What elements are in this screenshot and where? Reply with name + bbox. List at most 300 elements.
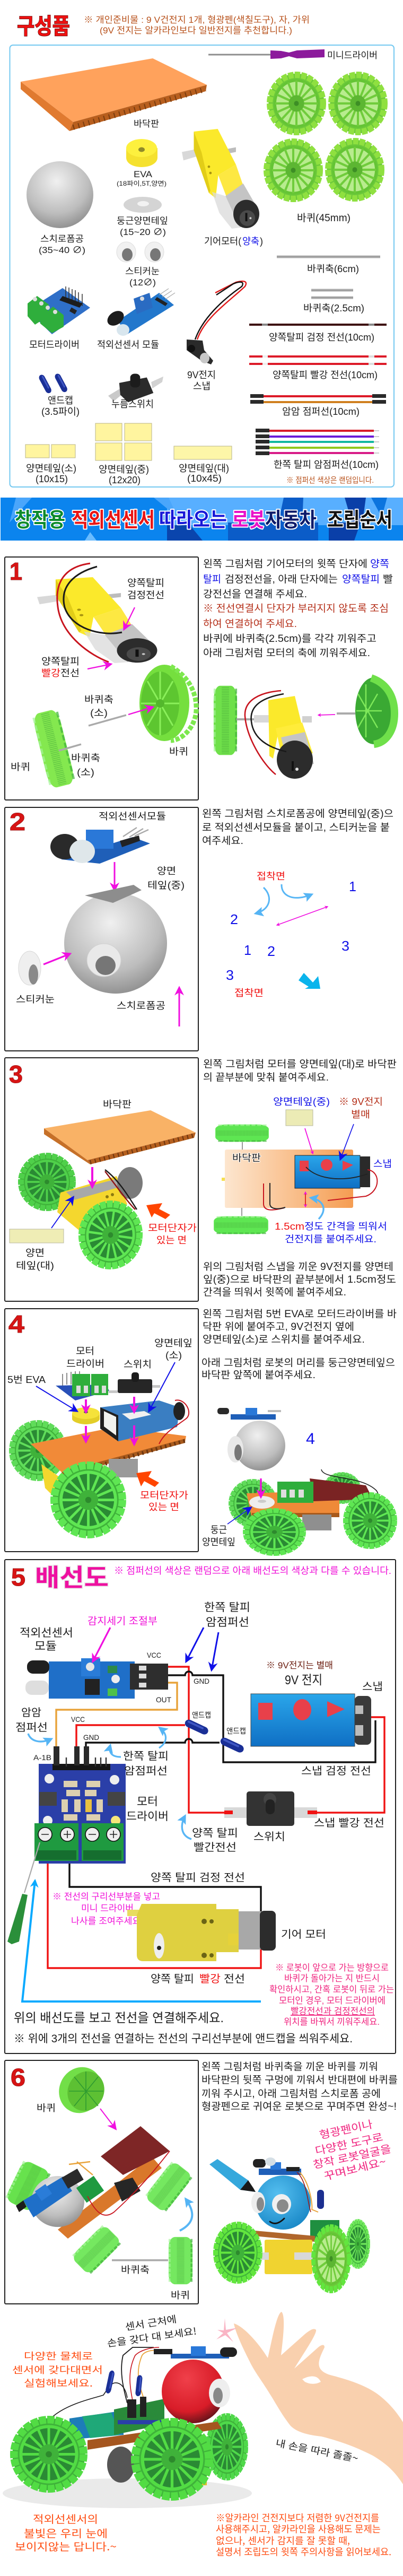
- illustration: battery placement: 바닥판: [232, 1153, 261, 1163]
- text block: step 1 instructions: ※ 전선연결시 단자가 부러지지 않도록 조심: [203, 603, 389, 614]
- illustration: red robot car: [3, 2346, 252, 2508]
- icon: front wheel: [52, 1464, 124, 1536]
- label: wheels: 바퀴(45mm): [297, 212, 351, 224]
- note: rotation direction: 빨강전선과 검정전선의: [291, 2006, 375, 2016]
- callout: pen decoration: 꾸며보세요~: [322, 2153, 388, 2183]
- wire labels: GND: [194, 1677, 209, 1685]
- icon: mini screwdriver: [208, 49, 325, 59]
- label: wheel: 바퀴: [37, 2103, 56, 2113]
- label: sticker eyes: (12∅): [129, 277, 156, 288]
- label: sticker eyes: 스티커눈: [125, 266, 160, 276]
- text block: step 1 instructions: 양쪽탈피: [342, 573, 380, 585]
- wire labels: VCC: [71, 1715, 85, 1724]
- label: driver: 모터: [137, 1796, 158, 1808]
- text block: step 1 instructions: 강전선을 연결해 주세요.: [203, 588, 307, 600]
- label: tape medium: [147, 866, 185, 891]
- icon: large double-sided tape: [174, 446, 232, 459]
- text block: IR invisible: 적외선센서의: [33, 2511, 98, 2526]
- label: both-side red: 양쪽 탈피: [151, 1973, 194, 1985]
- title: components heading: 구성품: [17, 14, 70, 39]
- illustration: battery placement: 건전지를 붙여주세요.: [285, 1234, 376, 1245]
- wire labels: VCC: [147, 1651, 161, 1659]
- label: both-side red: [192, 1827, 238, 1853]
- arrow: label to EVA: [36, 1386, 77, 1411]
- icon: gear motor with wires: [37, 563, 157, 663]
- label: axle right: [84, 694, 113, 718]
- label: motor terminal side: [140, 1490, 188, 1512]
- label: gear motor: 기어 모터: [281, 1928, 326, 1940]
- label: round tape: (15~20 ∅): [120, 227, 166, 237]
- label: EVA: (18파이,5T,양면): [117, 180, 167, 187]
- label: snap: 스냅: [362, 1681, 383, 1693]
- icon: one-side stripped jumper wires: [256, 429, 379, 455]
- label: driver: 드라이버: [126, 1811, 169, 1823]
- icon: end caps: [38, 372, 68, 394]
- label: sticker eye: 스티커눈: [16, 994, 55, 1005]
- handwritten note: hand near sensor: 센서 근처에: [124, 2312, 178, 2334]
- panel: components: [10, 45, 394, 487]
- text block: step 1 instructions: 빨: [383, 573, 393, 585]
- label: one-side jumper top: 한쪽 탈피: [204, 1602, 250, 1614]
- label: axle 6cm: 바퀴축(6cm): [307, 264, 359, 274]
- icon: axle left: [59, 744, 81, 751]
- text block: IR invisible: [15, 2511, 117, 2554]
- handwritten note: hand near sensor: [106, 2312, 197, 2350]
- label: one-side jumper top: 암점퍼선: [206, 1616, 249, 1629]
- text block: test with objects: [12, 2349, 103, 2390]
- arrow: to lower terminal: [87, 664, 111, 669]
- text block: step 2 instructions: 여주세요.: [202, 835, 243, 847]
- icon: switch: [224, 1791, 317, 1826]
- arrow: jumper one: [186, 1628, 204, 1661]
- label: tape medium: 양면: [157, 866, 176, 876]
- icon: motor driver board: [34, 1746, 126, 1864]
- label: sensitivity adjust: 감지세기 조절부: [87, 1615, 157, 1627]
- panel: step 6: [4, 2060, 198, 2304]
- label: FF jumper: 점퍼선: [15, 1721, 48, 1734]
- arrow: wheel up: [180, 2199, 192, 2231]
- arrow: label to tape: [149, 1362, 175, 1411]
- label: push switch: 누름스위치: [111, 399, 154, 410]
- illustration: battery placement: ※ 9V전지: [339, 1096, 383, 1107]
- label: snap red wire: 스냅 빨강 전선: [314, 1817, 384, 1829]
- label: 9V snap: [187, 370, 216, 391]
- diagram: sticking faces: 접착면: [234, 988, 264, 998]
- step number 6: 6: [11, 2064, 25, 2091]
- label: IR module: 적외선센서모듈: [99, 811, 166, 822]
- text block: step 1 instructions: 아래 그림처럼 모터의 축에 끼워주세요.: [203, 647, 370, 659]
- icon: four wheels: [265, 74, 386, 200]
- illustration: blue robot: [209, 2157, 370, 2291]
- label: right wheel: 바퀴: [169, 746, 188, 757]
- icon: medium double-sided tape: [95, 423, 152, 460]
- text block: step 2 instructions: 왼쪽 그림처럼 스치로폼공에 양면테잎(중)으: [202, 808, 393, 820]
- banner: assembly title: 적외선센서: [72, 509, 155, 532]
- label: round tape: 둥근양면테잎: [117, 216, 168, 226]
- end caps on wires: [183, 1711, 246, 1754]
- label: black wire: [127, 578, 164, 601]
- label: snap black wire: 스냅 검정 전선: [301, 1765, 371, 1777]
- banner: assembly title: 조립순서: [327, 509, 392, 532]
- labels: parts above: [7, 1338, 192, 1385]
- text block: test with objects: 실험해보세요.: [24, 2376, 93, 2390]
- icon: back wheel: [20, 1154, 74, 1209]
- title: step 5: [11, 1563, 109, 1591]
- icon: IR module: [50, 828, 150, 864]
- banner: assembly title: 로봇: [232, 509, 265, 532]
- label: one-side jumper lower: 한쪽 탈피: [123, 1750, 169, 1762]
- illustration: battery placement: 별매: [351, 1109, 370, 1120]
- label: styrofoam ball: [39, 234, 85, 255]
- text block: battery advice: [216, 2511, 391, 2558]
- label: gear motor: [204, 236, 263, 247]
- icon: female-female jumper wires: [250, 394, 386, 404]
- label: sticker eyes: [125, 266, 160, 288]
- label: IR module: 적외선센서: [20, 1627, 73, 1639]
- label: medium tape: (12x20): [109, 475, 141, 485]
- handwritten note: following the hand: 내 손을 따라 졸졸~: [275, 2435, 360, 2465]
- text block: step 6 instructions: [202, 2061, 398, 2112]
- label: gear motor: 기어모터(: [204, 236, 241, 247]
- label: end caps: [41, 395, 80, 417]
- diagram: sticking faces: 1: [244, 942, 251, 958]
- label: IR module: 모듈: [34, 1640, 57, 1652]
- text block: step 1 instructions: 탈피: [203, 573, 221, 585]
- label: axle 2.5cm: 바퀴축(2.5cm): [303, 303, 364, 314]
- icon: axle 6cm: [277, 255, 380, 258]
- label: red wire: 전선: [60, 668, 80, 678]
- note: personal supplies: [84, 15, 310, 36]
- arrow: red wire: [182, 1816, 191, 1839]
- label: 9V snap: 9V전지: [187, 370, 216, 380]
- handwritten note: hand near sensor: 손을 갖다 대 보세요!: [106, 2324, 197, 2350]
- icon: motor under board: [41, 1459, 138, 1501]
- wire labels: A-1B: [33, 1753, 51, 1762]
- text block: IR invisible: 보이지않는 답니다.~: [15, 2538, 117, 2554]
- label: FF jumper: 암암: [21, 1707, 41, 1719]
- arrow: axle into wheel: [128, 707, 153, 715]
- label: one-side jumper lower: 암점퍼선: [124, 1765, 168, 1777]
- arrow: board onto motor: [91, 1167, 93, 1187]
- label: motor driver: 모터드라이버: [29, 340, 80, 350]
- illustration: battery placement: 양면테잎(중): [273, 1096, 330, 1107]
- label: styrofoam ball: 스치로폼공: [117, 1000, 165, 1011]
- label: red wire: 빨강: [41, 668, 60, 678]
- text block: step 3 top: 왼쪽 그림처럼 모터를 양면테잎(대)로 바닥판: [203, 1058, 397, 1070]
- label: IR sensor module: 적외선센서 모듈: [97, 340, 159, 350]
- label: large tape: [179, 463, 229, 484]
- label: end caps: 앤드캡: [48, 395, 73, 406]
- icon: 9V battery large: [251, 1694, 371, 1746]
- label: axle right: (소): [90, 708, 108, 718]
- icon: large tape: [10, 1229, 64, 1243]
- text block: step 4 instructions: 닥판 위에 붙여주고, 9V건전지 옆에: [203, 1321, 354, 1333]
- label: both-side red: 전선: [224, 1973, 245, 1985]
- illustration: head on car: [202, 1408, 396, 1554]
- label: FF jumper: [15, 1707, 48, 1734]
- arrow: eye to ball: [43, 954, 70, 964]
- label: motor terminal side: 있는 면: [156, 1235, 187, 1246]
- illustration: motor with wheels assembled: [214, 677, 395, 779]
- label: gear motor: 양축: [242, 236, 259, 247]
- label: end caps: (3.5파이): [41, 406, 80, 417]
- icon: black stripped wire: [249, 324, 387, 326]
- label: small tape: (10x15): [36, 474, 68, 484]
- icon: front wheel: [76, 1199, 145, 1271]
- icon: motor driver: [56, 1371, 109, 1400]
- panel: step 4: [5, 1309, 198, 1552]
- arrow: up to ball: [178, 988, 180, 1026]
- diagram: sticking faces: 3: [341, 938, 349, 954]
- icon: styrofoam ball: [27, 161, 93, 228]
- diagram: sticking faces: 접착면: [257, 871, 285, 882]
- text block: step 4 instructions: 양면테잎(소)로 스위치를 붙여주세요.: [203, 1334, 365, 1345]
- label: black wire: 양쪽탈피 검정 전선(10cm): [269, 332, 374, 343]
- text block: IR invisible: 불빛은 우리 눈에: [24, 2525, 108, 2540]
- icon: push switch: [108, 374, 163, 402]
- text block: step 3 top: 의 끝부분에 맞춰 붙여주세요.: [203, 1072, 329, 1083]
- callout: pen decoration: [311, 2116, 392, 2183]
- title: step 5: 배선도: [35, 1564, 109, 1591]
- label: axle: 바퀴축: [121, 2265, 150, 2275]
- arrow: wheel to axle: [100, 2109, 116, 2129]
- label: round tape: [117, 216, 168, 237]
- callout: pen decoration: 형광펜이나: [318, 2116, 374, 2142]
- label: motor terminal side: [148, 1223, 197, 1246]
- labels: parts above: 스위치: [124, 1359, 152, 1370]
- label: red wire: 양쪽탈피: [41, 656, 80, 667]
- icon: gear motor: [182, 129, 259, 229]
- icon: orange board: [31, 1427, 186, 1476]
- icon: orange board: [44, 1110, 196, 1164]
- text block: step 1 instructions: 하여 연결하여 주세요.: [203, 618, 297, 630]
- label: EVA: [117, 169, 167, 187]
- label: both-side red: 양쪽 탈피: [192, 1827, 238, 1839]
- arrow: FF jumper: [28, 1734, 51, 1742]
- text block: step 1 instructions: 양쪽: [370, 558, 389, 570]
- note: tighten screw: 나사를 조여주세요.: [71, 1916, 143, 1926]
- text block: step 1 instructions: [203, 558, 393, 659]
- label: 9V battery: 9V 전지: [285, 1673, 322, 1687]
- text block: battery advice: ※알카라인 건전지보다 저렴한 9V건전지를: [216, 2511, 379, 2525]
- text block: step 3 bottom: 간격을 띄워서 윗쪽에 붙여주세요.: [203, 1286, 346, 1298]
- label: both-side red: 빨강: [199, 1973, 221, 1985]
- note: battery sold separately: ※ 9V전지는 별매: [266, 1660, 333, 1670]
- diagram: sticking faces: 2: [230, 911, 238, 927]
- arrow: to upper terminal: [124, 607, 135, 629]
- labels: parts above: 드라이버: [66, 1359, 104, 1369]
- icon: red stripped wires: [249, 355, 387, 365]
- arrow: motor terminal side: [136, 1471, 159, 1487]
- label: gear motor: ): [260, 236, 263, 247]
- text block: step 1 instructions: 바퀴에 바퀴축(2.5cm)를 각각 끼워주고: [203, 633, 376, 645]
- label: large tape: 양면: [25, 1248, 45, 1258]
- labels: parts above: 5번 EVA: [7, 1374, 46, 1385]
- text block: step 4 instructions: 왼쪽 그림처럼 5번 EVA로 모터드라이버를 바: [203, 1308, 397, 1320]
- labels: parts above: (소): [165, 1350, 182, 1361]
- label: motor terminal side: 있는 면: [148, 1502, 179, 1512]
- label: switch: 스위치: [253, 1831, 285, 1843]
- banner: assembly title: 자동차: [265, 509, 317, 532]
- callout: pen decoration: 창작 로봇얼굴을: [311, 2140, 392, 2172]
- label: medium tape: 양면테잎(중): [99, 464, 149, 475]
- arrow: battery to board: [133, 1425, 135, 1444]
- arrow: driver to EVA: [85, 1399, 87, 1412]
- text block: step 4 instructions: 아래 그림처럼 로봇의 머리를 둥근양면테잎으: [202, 1357, 395, 1369]
- label: EVA: EVA: [134, 169, 153, 179]
- note: personal supplies: (9V 전지는 알카라인보다 일반전지를 추천합니다.): [100, 25, 292, 36]
- step number 2: 2: [10, 808, 25, 836]
- note: jumper colour: ※ 점퍼선의 색상은 랜덤으로 아래 배선도의 색상과 다를 수 있습니다.: [114, 1565, 391, 1576]
- arrow: EVA to board: [85, 1426, 87, 1442]
- label: black wire: 양쪽탈피: [127, 578, 164, 588]
- end caps on wires: 앤드캡: [192, 1711, 211, 1719]
- illustration: battery placement: 1.5cm: [275, 1221, 304, 1232]
- icon: EVA: [126, 139, 157, 167]
- label: red wire: [41, 656, 80, 678]
- illustration: battery placement: 정도 간격을 띄워서: [304, 1221, 387, 1232]
- icon: loose sticker eye: [19, 951, 41, 985]
- label: base board: 바닥판: [103, 1099, 132, 1110]
- icon: EVA: [72, 1407, 100, 1424]
- label: large tape: 양면테잎(대): [179, 463, 229, 474]
- icon: motor driver: [28, 286, 90, 334]
- text: end cap note: ※ 위에 3개의 전선을 연결하는 전선의 구리선부분에 앤드캡을 씌워주세요.: [14, 2033, 353, 2045]
- label: both-side red: 빨간전선: [194, 1841, 236, 1853]
- label: axle right: 바퀴축: [84, 694, 113, 705]
- icon: axle right: [89, 715, 126, 726]
- icon: switch: [109, 1372, 160, 1393]
- icon: axle 2.5cm pair: [311, 289, 353, 299]
- panel: step 5 wiring: [5, 1560, 396, 2053]
- arrow: tape onto motor: [51, 1197, 73, 1228]
- label: wheel: 바퀴: [171, 2290, 190, 2301]
- text block: battery advice: 설명서 조립도의 윗쪽 주의사항을 읽어보세요.: [216, 2545, 391, 2558]
- diagram: sticking faces: 1: [349, 878, 356, 894]
- banner: assembly title: [1, 498, 403, 541]
- label: mini screwdriver: 미니드라이버: [327, 50, 378, 60]
- arrow: sensitivity: [93, 1628, 110, 1661]
- icon: 9V battery: [100, 1400, 189, 1444]
- label: 9V snap: 스냅: [193, 381, 211, 391]
- wires: red, black, orange, blue: [22, 1667, 384, 2001]
- callout: pen decoration: 다양한 도구로: [313, 2128, 384, 2158]
- illustration: head on car: 양면테잎: [202, 1537, 235, 1547]
- icon: IR sensor module: [104, 289, 175, 336]
- label: tape medium: 테잎(중): [147, 880, 185, 891]
- label: large tape: (10x45): [187, 473, 222, 484]
- note: rotation direction: 위치를 바꿔서 끼워주세요.: [284, 2017, 380, 2027]
- label: one-side jumper: 한쪽 탈피 암점퍼선(10cm): [274, 459, 379, 470]
- banner: assembly title: 따라오는: [159, 509, 227, 532]
- icon: back wheel: [11, 1422, 65, 1480]
- illustration: battery placement: 스냅: [373, 1159, 392, 1169]
- text block: step 1 instructions: 왼쪽 그림처럼 기어모터의 윗쪽 단자에: [203, 558, 367, 570]
- label: both-side black: 양쪽 탈피 검정 전선: [151, 1872, 245, 1884]
- label: axle left: [71, 753, 100, 778]
- icon: round double-sided tape: [124, 197, 162, 213]
- text block: step 6 instructions: 바닥판의 뒷쪽 구멍에 끼워서 반대편에 바퀴를: [202, 2074, 398, 2086]
- banner: assembly title: 창작용: [15, 509, 65, 532]
- note: tighten screw: ※ 전선의 구리선부분을 넣고: [52, 1892, 160, 1902]
- note: personal supplies: ※ 개인준비물 : 9 V건전지 1개, 형광펜(색칠도구), 자, 가위: [84, 15, 310, 25]
- note: rotation direction: 확인하시고, 간혹 로봇이 뒤로 가는: [269, 1985, 394, 1995]
- label: IR module: [20, 1627, 73, 1652]
- label: both-side red: [151, 1973, 245, 1985]
- label: large tape: 테잎(대): [16, 1260, 54, 1271]
- label: one-side jumper top: [204, 1602, 250, 1629]
- note: rotation direction: 모터인 경우, 모터 드라이버에: [279, 1996, 386, 2006]
- label: jumper wires: 암암 점퍼선(10cm): [282, 406, 360, 417]
- label: medium tape: [99, 464, 149, 485]
- label: styrofoam ball: 스치로폼공: [40, 234, 84, 244]
- label: base board: 바닥판: [134, 119, 159, 129]
- text block: step 3 bottom: 위의 그림처럼 스냅을 끼운 9V전지를 양면테: [203, 1261, 393, 1273]
- text block: battery advice: 사용해주시고, 알카라인을 사용해도 문제는: [216, 2522, 381, 2536]
- icon: left wheel: [32, 709, 76, 789]
- label: large tape: [16, 1248, 54, 1271]
- label: motor terminal side: 모터단자가: [140, 1490, 188, 1501]
- note: jumper colours random: ※ 점퍼선 색상은 랜덤입니다.: [286, 476, 374, 485]
- wire labels: GND: [83, 1733, 99, 1742]
- label: axle left: (소): [77, 767, 94, 778]
- text block: step 3 bottom: 잎(중)으로 바닥판의 끝부분에서 1.5cm정도: [203, 1274, 396, 1285]
- illustration: battery placement: [214, 1096, 392, 1245]
- wire labels: OUT: [156, 1695, 171, 1704]
- note: tighten screw: 미니 드라이버: [81, 1903, 134, 1913]
- icon: axle and wheel: [112, 2237, 192, 2284]
- illustration: head on car: 4: [306, 1430, 315, 1448]
- icon: 9V battery snap: [187, 281, 246, 364]
- text block: step 6 instructions: 형광펜으로 귀여운 로봇으로 꾸며주면 완성~!: [202, 2101, 397, 2112]
- text: wiring instruction: 위의 배선도를 보고 전선을 연결해주세요.: [14, 2011, 224, 2025]
- note: rotation direction: 바퀴가 돌아가는 지 반드시: [284, 1973, 380, 1983]
- icon: right wheel (inner side): [139, 665, 196, 741]
- diagram: sticking faces: [226, 871, 356, 998]
- diagram: sticking faces: 2: [267, 943, 275, 959]
- text block: step 1 instructions: 검정전선을, 아래 단자에는: [225, 573, 338, 585]
- note: rotation direction: ※ 로봇이 앞으로 가는 방향으로: [275, 1963, 389, 1973]
- arrow: tape down: [113, 862, 116, 890]
- label: motor terminal side: 모터단자가: [148, 1223, 197, 1233]
- text block: battery advice: 없으나, 센서가 감지를 잘 못할 때,: [216, 2534, 350, 2547]
- panel: step 3: [5, 1058, 198, 1301]
- icon: car assembly tilted: [4, 2126, 194, 2276]
- label: small tape: 양면테잎(소): [26, 463, 76, 474]
- text block: step 3 bottom: [203, 1261, 396, 1298]
- icon: small double-sided tape: [25, 445, 75, 458]
- step number 1: 1: [10, 558, 22, 585]
- title: step 5: 5: [11, 1563, 25, 1591]
- arrow: motor terminal side: [146, 1203, 170, 1219]
- icon: styrofoam ball with eye and tape: [64, 885, 167, 994]
- text block: step 4 instructions: 바닥판 앞쪽에 붙여주세요.: [202, 1369, 316, 1381]
- icon: gear motor side view: [127, 1904, 276, 1961]
- end caps on wires: 앤드캡: [226, 1727, 246, 1735]
- label: black wire: 검정전선: [127, 590, 164, 601]
- icon: wheel top: [51, 2060, 111, 2120]
- panel: step 2: [5, 807, 198, 1051]
- text block: step 2 instructions: [202, 808, 393, 847]
- arrow: one-side jumper black: [110, 1745, 121, 1757]
- arrow: jumper two: [212, 1632, 218, 1670]
- icon: sticker eyes: [117, 242, 164, 262]
- text block: step 3 top: [203, 1058, 397, 1083]
- label: styrofoam ball: (35~40 ∅): [39, 245, 85, 255]
- text block: step 6 instructions: 끼워 주시고, 아래 그림처럼 스치로폼 공에: [202, 2088, 381, 2100]
- text block: step 6 instructions: 왼쪽 그림처럼 바퀴축을 끼운 바퀴를 끼워: [202, 2061, 378, 2073]
- arrow: one-side jumper red: [159, 1728, 166, 1748]
